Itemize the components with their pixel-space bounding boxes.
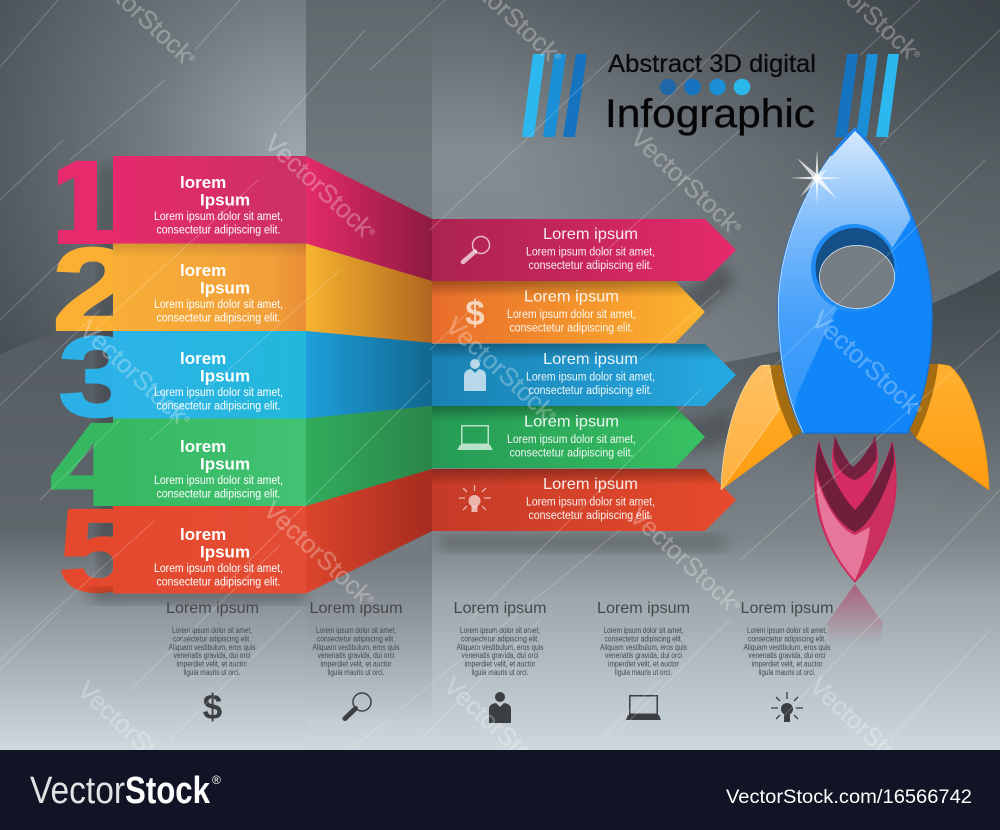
watermark text: VectorStock	[438, 672, 557, 785]
number 5: 5	[58, 485, 140, 617]
column 5	[740, 600, 834, 722]
title line 1: Abstract 3D digital	[608, 50, 816, 78]
panel: ribbon 1: lorem	[180, 173, 226, 192]
panel: arrow 3: Lorem ipsum	[543, 351, 638, 368]
panel: ribbon 4: lorem	[180, 437, 226, 456]
column 2: venenatis gravida, dui orci	[318, 651, 395, 660]
column 2: Aliquam vestibulum, eros quis	[312, 643, 400, 652]
icon: laptop	[457, 425, 493, 450]
ribbon shadows	[90, 262, 736, 602]
column 2: consectetur adipiscing elit.	[317, 634, 395, 644]
watermark text: VectorStock	[625, 124, 744, 237]
rocket left fin	[721, 365, 802, 490]
rocket flames	[815, 436, 896, 582]
column 1: imperdiet velit, et auctor	[176, 660, 248, 668]
panel: ribbon 3: consectetur adipiscing elit.	[156, 400, 280, 412]
panel: arrow 5: Lorem ipsum dolor sit amet,	[526, 496, 655, 508]
icon: magnifier	[463, 236, 490, 262]
watermark text: VectorStock	[804, 672, 923, 785]
column 2: imperdiet velit, et auctor	[320, 660, 392, 668]
column 3	[454, 600, 546, 723]
icon: light bulb	[771, 692, 803, 722]
column 2	[310, 600, 402, 718]
panel: arrow 5: Lorem ipsum	[543, 476, 638, 493]
column 4: venenatis gravida, dui orci	[605, 651, 682, 660]
footer id: VectorStock.com/16566742	[726, 787, 972, 808]
panel: ribbon 1	[113, 156, 432, 281]
rocket window	[811, 224, 897, 312]
panel: arrow 5	[432, 469, 736, 531]
column 3: venenatis gravida, dui orci	[462, 651, 539, 660]
panel: ribbon 5: Lorem ipsum dolor sit amet,	[154, 563, 283, 575]
panel: arrow 3	[432, 344, 736, 406]
icon: magnifier	[345, 693, 371, 718]
panel: arrow 4: Lorem ipsum dolor sit amet,	[507, 434, 636, 446]
footer registered mark: ®	[212, 773, 221, 787]
icon: laptop	[626, 695, 661, 720]
panel: arrow 5: consectetur adipiscing elit.	[528, 510, 652, 522]
panel: ribbon 2	[113, 244, 432, 343]
title line 2: Infographic	[605, 92, 815, 136]
icon: person	[464, 359, 486, 391]
rocket body	[777, 127, 933, 434]
column 2: Lorem ipsum dolor sit amet,	[316, 626, 396, 635]
title block	[522, 50, 899, 137]
sparkle	[790, 150, 845, 205]
watermark text: ®	[182, 414, 192, 425]
panel: arrow 3: Lorem ipsum dolor sit amet,	[526, 372, 655, 384]
column 5: ligula mauris ut orci.	[758, 668, 816, 677]
watermark text: ®	[367, 227, 377, 238]
footer logo: VectorStock	[30, 770, 211, 812]
panel: ribbon 2: consectetur adipiscing elit.	[156, 312, 280, 324]
column 5: imperdiet velit, et auctor	[752, 660, 823, 668]
panel: ribbon 2: Ipsum	[200, 278, 250, 298]
column 1: Aliquam vestibulum, eros quis	[168, 643, 256, 652]
panel: ribbon 1: Lorem ipsum dolor sit amet,	[154, 211, 283, 223]
panel: arrow 1: consectetur adipiscing elit.	[528, 260, 652, 272]
column 3: Lorem ipsum	[454, 600, 546, 617]
panel: arrow 1: Lorem ipsum dolor sit amet,	[526, 246, 655, 258]
watermark text: VectorStock	[259, 129, 378, 242]
watermark text: ®	[366, 594, 376, 605]
watermark text: ®	[732, 600, 742, 611]
watermark text: ®	[187, 53, 197, 64]
panel: ribbon 1: Ipsum	[200, 190, 250, 210]
digit shadow	[100, 165, 116, 590]
panel: ribbon 5: consectetur adipiscing elit.	[156, 576, 280, 588]
rocket right fin	[909, 364, 989, 490]
watermark text: ®	[733, 222, 743, 233]
panel: arrow 2: Lorem ipsum	[524, 288, 619, 306]
panel: ribbon 2: lorem	[180, 261, 226, 280]
panel: arrow 4: Lorem ipsum	[524, 414, 619, 430]
column 5: consectetur adipiscing elit.	[748, 634, 826, 644]
footer bar	[0, 750, 1000, 830]
icon: dollar: $	[465, 294, 485, 333]
column 1: Lorem ipsum	[166, 600, 259, 617]
column 5: Lorem ipsum dolor sit amet,	[747, 626, 827, 635]
icon: light bulb	[459, 485, 491, 512]
column 1: consectetur adipiscing elit.	[173, 634, 251, 644]
number 1: 1	[41, 137, 123, 269]
number 4: 4	[50, 398, 126, 530]
column 1	[166, 600, 259, 727]
column 3: ligula mauris ut orci.	[472, 668, 528, 677]
panel: ribbon 1: consectetur adipiscing elit.	[156, 224, 280, 236]
column 4: imperdiet velit, et auctor	[608, 660, 679, 668]
watermark text: VectorStock	[806, 306, 925, 419]
column 1: venenatis gravida, dui orci	[174, 651, 251, 660]
panel: arrow 4: consectetur adipiscing elit.	[510, 448, 634, 460]
column 3: consectetur adipiscing elit.	[461, 634, 539, 644]
watermark text: VectorStock	[440, 312, 559, 425]
watermark text: VectorStock	[74, 316, 193, 429]
column 3: imperdiet velit, et auctor	[464, 660, 536, 668]
panel: ribbon 4	[113, 406, 432, 506]
panel: ribbon 3: lorem	[180, 349, 226, 368]
column 3: Aliquam vestibulum, eros quis	[456, 643, 544, 652]
panel: arrow 1: Lorem ipsum	[543, 226, 638, 243]
icon: dollar: $	[203, 688, 222, 727]
column 4	[597, 600, 690, 720]
panel: ribbon 3	[113, 331, 432, 418]
panel: ribbon 4: Ipsum	[200, 454, 250, 474]
column 1: ligula mauris ut orci.	[184, 668, 240, 677]
panel: ribbon 3: Lorem ipsum dolor sit amet,	[154, 387, 283, 399]
watermark text: VectorStock	[258, 496, 377, 609]
column 4: Aliquam vestibulum, eros quis	[600, 643, 687, 652]
column 4: consectetur adipiscing elit.	[604, 634, 682, 644]
panel: arrow 2	[432, 281, 705, 343]
icon: person	[489, 692, 511, 723]
number 2: 2	[52, 224, 134, 356]
watermark text: VectorStock	[72, 676, 191, 789]
column 1: Lorem ipsum dolor sit amet,	[172, 626, 252, 635]
panel: ribbon 5: lorem	[180, 525, 226, 544]
column 2: Lorem ipsum	[310, 600, 402, 617]
number 3: 3	[58, 314, 137, 441]
watermark text: ®	[914, 404, 924, 415]
panel: ribbon 5: Ipsum	[200, 542, 250, 562]
column 4: ligula mauris ut orci.	[615, 668, 672, 677]
column 5: Lorem ipsum	[740, 600, 834, 617]
panel: arrow 1	[432, 219, 736, 281]
panel: ribbon 2: Lorem ipsum dolor sit amet,	[154, 299, 283, 311]
column 4: Lorem ipsum	[597, 600, 690, 617]
rocket	[721, 110, 989, 645]
panel: ribbon 4: consectetur adipiscing elit.	[156, 488, 280, 500]
panel: ribbon 3: Ipsum	[200, 366, 250, 386]
right stripes	[835, 54, 899, 137]
panel: arrow 3: consectetur adipiscing elit.	[528, 385, 652, 397]
left stripes	[522, 54, 587, 137]
column 5: venenatis gravida, dui orci	[748, 651, 826, 660]
panel: ribbon 4: Lorem ipsum dolor sit amet,	[154, 475, 283, 487]
column 3: Lorem ipsum dolor sit amet,	[460, 626, 540, 635]
panel: arrow 2: Lorem ipsum dolor sit amet,	[507, 309, 636, 321]
rocket reflection	[827, 584, 883, 645]
column 4: Lorem ipsum dolor sit amet,	[604, 626, 684, 635]
watermark text: ®	[553, 51, 563, 62]
watermark text: ®	[912, 49, 922, 60]
panel: ribbon 5	[113, 469, 432, 594]
watermark text: ®	[548, 410, 558, 421]
watermark text: VectorStock	[624, 502, 743, 615]
dots	[660, 79, 750, 95]
panel: arrow 4	[432, 406, 705, 468]
column 5: Aliquam vestibulum, eros quis	[744, 643, 830, 652]
column 2: ligula mauris ut orci.	[328, 668, 384, 677]
panel: arrow 2: consectetur adipiscing elit.	[510, 322, 634, 334]
